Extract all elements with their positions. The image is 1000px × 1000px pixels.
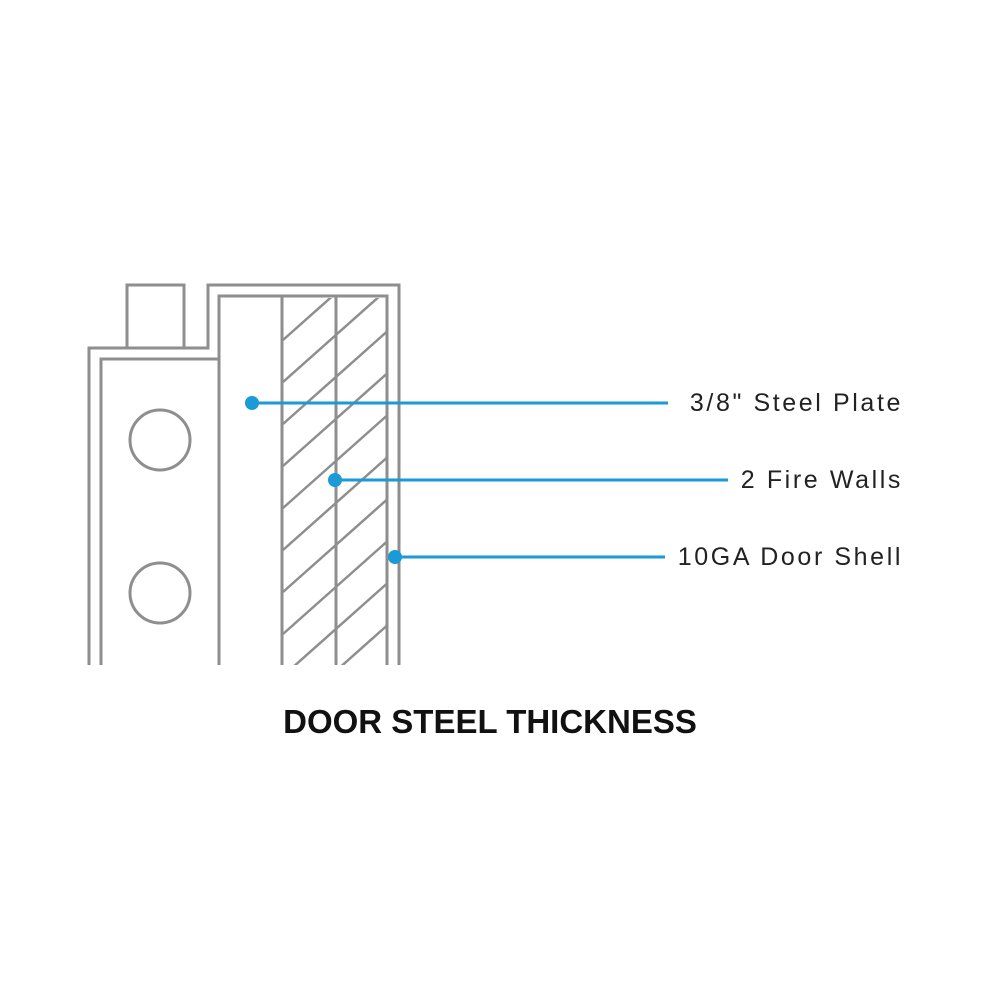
callout: steel plate: 3/8" Steel Plate	[690, 389, 903, 417]
fire wall divider lines	[282, 296, 336, 665]
title: DOOR STEEL THICKNESS	[283, 703, 697, 740]
callout: fire walls	[328, 466, 903, 494]
hatching	[284, 298, 386, 665]
bolt holes	[130, 410, 190, 623]
inner frame	[101, 296, 387, 665]
callout: door shell: 10GA Door Shell	[678, 543, 903, 571]
knob block	[127, 285, 184, 348]
steel plate left edge	[218, 359, 220, 665]
callout: fire walls: 2 Fire Walls	[741, 466, 903, 494]
callout: steel plate	[245, 389, 903, 417]
callout: door shell	[388, 543, 903, 571]
outer frame	[89, 285, 399, 665]
door cross-section diagram	[88, 284, 400, 665]
